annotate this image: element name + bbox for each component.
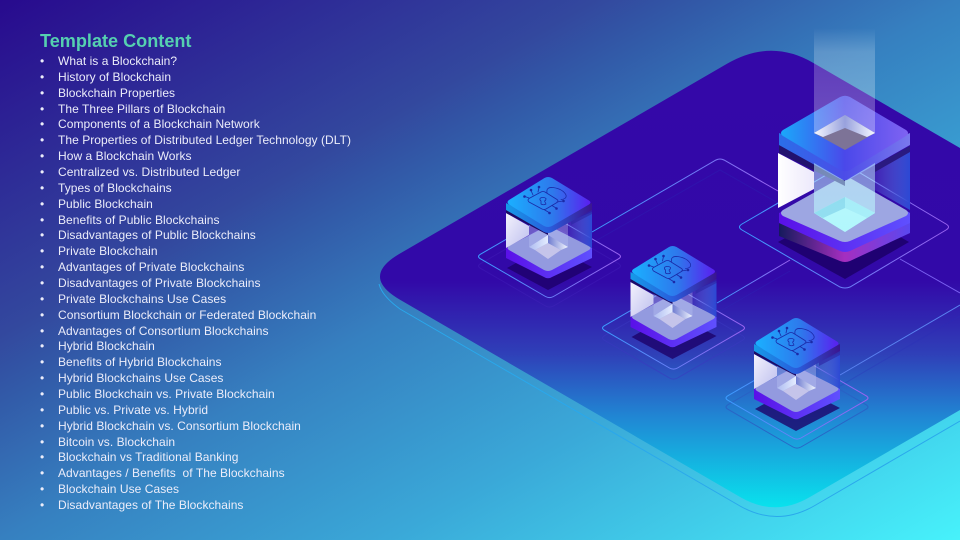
large cube lid opening — [814, 115, 875, 150]
contents list — [40, 54, 351, 512]
contents list: Blockchain Use Cases — [58, 482, 179, 496]
platform — [380, 51, 960, 507]
contents list: Benefits of Public Blockchains — [58, 213, 220, 227]
contents list: History of Blockchain — [58, 70, 171, 84]
frame: node two — [602, 287, 744, 379]
contents list: Hybrid Blockchain — [58, 339, 155, 353]
contents list: Disadvantages of Private Blockchains — [58, 276, 261, 290]
frame: large node — [740, 166, 948, 288]
cube: large central node — [778, 28, 910, 279]
contents list: Hybrid Blockchain vs. Consortium Blockchain — [58, 419, 301, 433]
contents list: What is a Blockchain? — [58, 54, 177, 68]
large cube lid — [779, 133, 910, 180]
network lines — [592, 159, 960, 375]
contents list: Consortium Blockchain or Federated Blockchain — [58, 308, 316, 322]
large cube base — [779, 176, 910, 262]
contents list: Blockchain vs Traditional Banking — [58, 450, 238, 464]
contents list: Public vs. Private vs. Hybrid — [58, 403, 208, 417]
contents list: Private Blockchain — [58, 244, 158, 258]
contents list: Benefits of Hybrid Blockchains — [58, 355, 222, 369]
large cube lower well — [814, 197, 875, 232]
contents list: Centralized vs. Distributed Ledger — [58, 165, 240, 179]
contents list: Advantages / Benefits of The Blockchains — [58, 466, 285, 480]
cube: node one — [506, 177, 592, 290]
contents list: The Properties of Distributed Ledger Technology (DLT) — [58, 133, 351, 147]
contents list: Bitcoin vs. Blockchain — [58, 435, 175, 449]
contents list: Components of a Blockchain Network — [58, 117, 260, 131]
frame: node three — [726, 357, 868, 448]
faint network lines — [592, 170, 960, 386]
light beam — [814, 28, 875, 232]
cube: node two — [630, 246, 716, 359]
contents list: Public Blockchain vs. Private Blockchain — [58, 387, 275, 401]
contents list: Disadvantages of Public Blockchains — [58, 228, 256, 242]
contents list: Blockchain Properties — [58, 86, 175, 100]
contents list: Public Blockchain — [58, 197, 153, 211]
contents list: How a Blockchain Works — [58, 149, 192, 163]
contents list: Advantages of Private Blockchains — [58, 260, 244, 274]
contents list: Advantages of Consortium Blockchains — [58, 324, 269, 338]
platform lower outline — [379, 284, 960, 516]
contents list: The Three Pillars of Blockchain — [58, 102, 225, 116]
cube: node three — [754, 318, 840, 431]
large cube glass panels — [778, 153, 814, 208]
contents list: Hybrid Blockchains Use Cases — [58, 371, 223, 385]
contents list: Types of Blockchains — [58, 181, 172, 195]
contents list: Disadvantages of The Blockchains — [58, 498, 243, 512]
title: Template Content — [40, 31, 191, 51]
contents list: Private Blockchains Use Cases — [58, 292, 226, 306]
large cube shadow — [778, 205, 909, 279]
frame: node one — [478, 215, 620, 307]
